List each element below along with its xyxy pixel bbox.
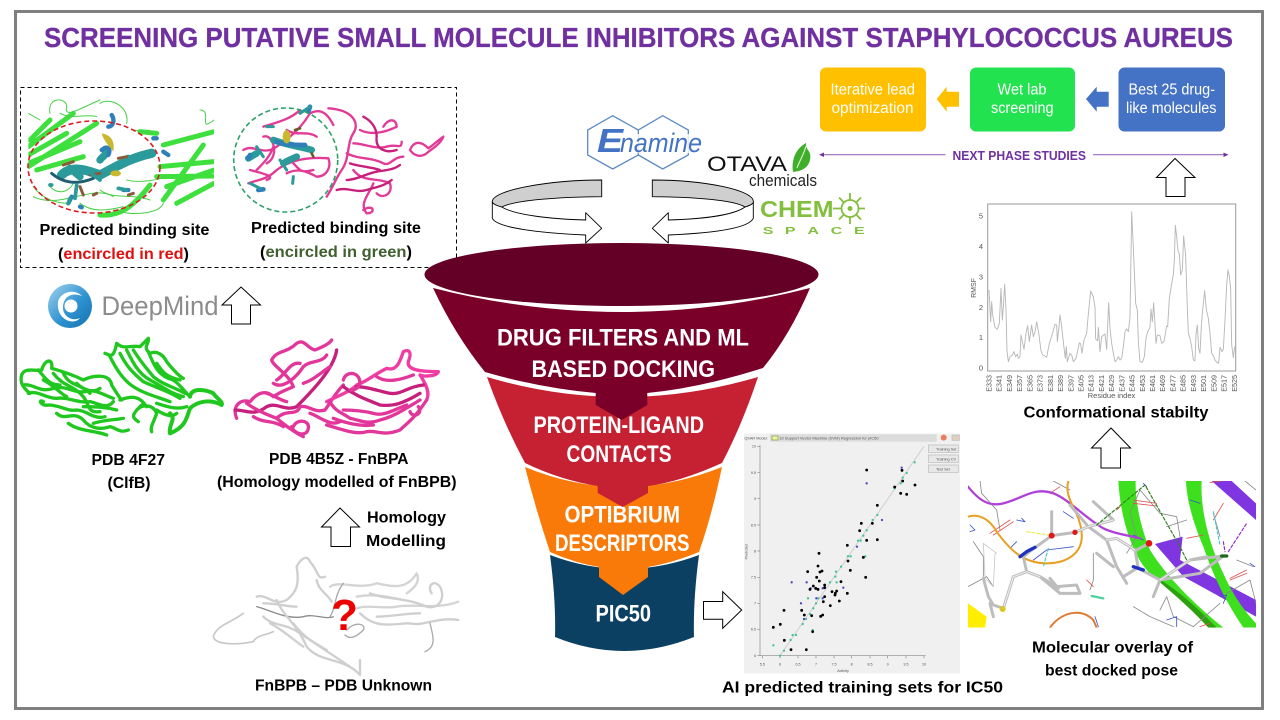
chart: RMSF line chart: E485 (1179, 375, 1188, 392)
box: wet lab screening: screening (991, 100, 1054, 117)
icon: Chemspace logo (760, 193, 865, 236)
label: conformational stability: Conformational stabilty (1024, 404, 1209, 422)
icon: Otava chemicals logo: OTAVA (707, 153, 787, 176)
arrow: docking to stability (1092, 428, 1130, 468)
label: homology modelling: Homology (367, 510, 446, 526)
chart: RMSF line chart: E373 (1036, 375, 1045, 392)
box: iterative lead optimization: optimization (832, 100, 914, 117)
chart: QSAR scatter plot: 10 (922, 663, 926, 667)
chart: RMSF line chart: 2 (979, 303, 983, 312)
funnel top opening (424, 243, 818, 306)
chart: QSAR scatter plot: 8 (851, 663, 853, 667)
funnel tier: Protein-ligand contacts: PROTEIN-LIGAND (534, 412, 704, 439)
label: molecular overlay (1032, 640, 1194, 680)
box: wet lab screening: Wet lab (998, 82, 1046, 98)
label: next phase studies (819, 148, 1228, 163)
label: molecular overlay: best docked pose (1045, 662, 1178, 680)
funnel (424, 243, 818, 651)
chart: RMSF line chart: E357 (1015, 375, 1024, 392)
label: PDB 4F27: PDB 4F27 (92, 452, 165, 469)
label: predicted site green: (encircled in green ) (260, 244, 412, 261)
chart: RMSF line chart: E453 (1138, 375, 1147, 392)
label: PDB 4B5Z: (Homology modelled of FnBPB) (217, 474, 456, 491)
chart: QSAR scatter plot: 6 (779, 663, 781, 667)
chart: QSAR scatter plot: Activity (837, 669, 849, 673)
label: molecular overlay: Molecular overlay of (1032, 640, 1194, 656)
label: PDB 4B5Z: PDB 4B5Z - FnBPA (269, 451, 408, 468)
label: predicted site green (251, 220, 421, 261)
chart: QSAR scatter plot: 7 (815, 663, 817, 667)
chart: RMSF line chart: E341 (995, 375, 1004, 392)
chart: QSAR scatter plot: 9.5 (751, 471, 756, 475)
label: next phase studies: NEXT PHASE STUDIES (952, 148, 1086, 163)
funnel tier: Optibrium descriptors (525, 467, 722, 595)
structure: green protein binding site (28, 100, 214, 215)
structure: pink protein binding site (243, 107, 443, 213)
arrow: right circular (652, 180, 753, 243)
funnel tier: PIC50: PIC50 (596, 600, 651, 628)
icon: DeepMind logo (48, 284, 218, 328)
structure: PDB 4F27 green protein (21, 338, 222, 435)
funnel tier: PIC50 (550, 555, 699, 651)
funnel tier: Drug filters and ML docking: DRUG FILTERS AND ML (497, 324, 749, 352)
chart: RMSF line chart: E469 (1158, 375, 1167, 392)
chart: QSAR scatter plot: QSAR Model: (744, 437, 768, 441)
chart: QSAR scatter plot: Training CV (936, 457, 957, 461)
chart: QSAR scatter plot: 6.5 (795, 663, 801, 667)
chart: QSAR scatter plot: 8.5 (867, 663, 873, 667)
box: iterative lead optimization (820, 68, 926, 132)
chart: RMSF line chart: E477 (1168, 375, 1178, 392)
chart: RMSF line chart: E397 (1066, 375, 1075, 392)
label: PDB 4F27 (92, 452, 165, 492)
chart: QSAR scatter plot: 6.5 (751, 628, 756, 632)
chart: RMSF line chart: 5 (979, 212, 983, 220)
chart: QSAR scatter plot: 5.5 (760, 663, 765, 667)
box: best 25 molecules (1118, 68, 1225, 132)
icon: Enamine logo (588, 116, 702, 169)
label: predicted site red: (encircled in red ) (58, 246, 189, 263)
label: homology modelling (366, 510, 446, 550)
outline: green encircled site (234, 108, 338, 212)
chart: RMSF line chart: 4 (979, 242, 983, 251)
chart: QSAR scatter plot: 10 Support Vector Machine (SVM) Regression for pIC50 (779, 436, 879, 441)
chart: RMSF line chart: E421 (1097, 375, 1106, 392)
image: molecular overlay docking (968, 480, 1256, 628)
chart: RMSF line chart: E501 (1199, 375, 1208, 392)
chart: RMSF line chart: E525 (1230, 375, 1239, 392)
chart: RMSF line chart: 0 (979, 364, 983, 372)
chart: QSAR scatter plot: 9 (754, 497, 756, 501)
funnel tier: Protein-ligand contacts: CONTACTS (566, 441, 672, 468)
structure: FnBPB unknown grey protein (213, 558, 458, 675)
chart: QSAR scatter plot: 7 (754, 602, 756, 606)
box: iterative lead optimization: Iterative lead (830, 82, 915, 98)
label: predicted site green: Predicted binding site (251, 220, 421, 237)
chart: RMSF line chart: E445 (1128, 375, 1137, 392)
chart: RMSF line chart: Residue index (1088, 391, 1136, 400)
chart: QSAR scatter plot: 7.5 (831, 663, 837, 667)
chart: RMSF line chart: E413 (1087, 375, 1096, 392)
funnel tier: Optibrium descriptors: DESCRIPTORS (555, 530, 690, 557)
chart: RMSF line chart: RMSF (971, 278, 978, 298)
label: predicted site red (40, 222, 210, 263)
arrow: to wet lab (1086, 87, 1109, 112)
box: wet lab screening (970, 68, 1075, 132)
funnel tier: Drug filters and ML docking: BASED DOCKING (532, 356, 715, 383)
label: PDB 4F27: (ClfB) (108, 475, 150, 492)
chart: QSAR scatter plot: 10 (752, 445, 756, 449)
chart: RMSF line chart: E493 (1189, 375, 1198, 392)
chart: QSAR scatter plot: Test Set (936, 467, 951, 471)
chart: QSAR scatter plot: 7.5 (751, 576, 756, 580)
label: FnBPB PDB unknown: FnBPB – PDB Unknown (255, 678, 432, 694)
arrow: homology modelling up (322, 508, 360, 546)
icon: Enamine logo: E (597, 122, 624, 159)
chart: RMSF line chart: E405 (1076, 375, 1086, 392)
chart: QSAR scatter plot: 6 (754, 654, 756, 658)
panel: predicted binding sites (20, 88, 456, 268)
panel: next phase steps (819, 68, 1228, 163)
icon: Otava chemicals logo: chemicals (749, 171, 817, 190)
icon: Chemspace logo: SPACE (763, 225, 865, 236)
structure: PDB 4B5Z pink protein (235, 340, 438, 437)
label: homology modelling: Modelling (366, 533, 446, 550)
outline: red encircled site (28, 121, 160, 213)
label: PDB 4B5Z (217, 451, 456, 491)
chart: RMSF line chart: E381 (1046, 375, 1055, 392)
chart: QSAR scatter plot: 8.5 (751, 523, 756, 527)
chart: QSAR scatter plot: 9.5 (903, 663, 909, 667)
chart: RMSF line chart (971, 204, 1239, 400)
chart: RMSF line chart: E509 (1209, 375, 1218, 392)
label: AI predicted training sets: AI predicted training sets for IC50 (722, 680, 1003, 696)
box: best 25 molecules: like molecules (1126, 100, 1217, 117)
chart: RMSF line chart: E365 (1025, 375, 1034, 392)
box: best 25 molecules: Best 25 drug- (1128, 82, 1215, 98)
icon: red question mark: ? (331, 591, 358, 640)
icon: Chemspace logo: CHEM (760, 196, 834, 222)
chart: RMSF line chart: E461 (1148, 375, 1157, 392)
chart: RMSF line chart: 1 (979, 333, 983, 342)
icon: Otava chemicals logo (707, 143, 817, 190)
arrow: DeepMind up (222, 287, 260, 324)
chart: RMSF line chart: E349 (1005, 375, 1014, 392)
arrow: stability to next phase (1156, 158, 1195, 196)
chart: QSAR scatter plot: Training Set (936, 447, 957, 451)
chart: RMSF line chart: E389 (1056, 375, 1065, 392)
chart: QSAR scatter plot: 8 (754, 549, 756, 553)
chart: RMSF line chart: E437 (1117, 375, 1126, 392)
chart: QSAR scatter plot: 9 (887, 663, 889, 667)
arrow: to iterative lead (937, 87, 959, 112)
funnel tier: Protein-ligand contacts (487, 377, 758, 507)
chart: RMSF line chart: 3 (979, 272, 983, 282)
chart: RMSF line chart: E517 (1220, 375, 1229, 392)
chart: RMSF line chart: E333 (984, 375, 994, 392)
icon: Enamine logo: namine (620, 128, 702, 158)
arrow: left circular (492, 180, 602, 243)
arrow: PIC50 to QSAR (704, 592, 742, 628)
chart: QSAR scatter plot: Predicted (744, 544, 748, 559)
icon: DeepMind logo: DeepMind (102, 291, 218, 321)
chart: QSAR scatter plot (744, 434, 960, 674)
label: predicted site red: Predicted binding site (40, 222, 210, 239)
chart: RMSF line chart: E429 (1107, 375, 1116, 392)
funnel tier: Drug filters and ML docking (433, 288, 810, 420)
funnel tier: Optibrium descriptors: OPTIBRIUM (564, 502, 680, 528)
